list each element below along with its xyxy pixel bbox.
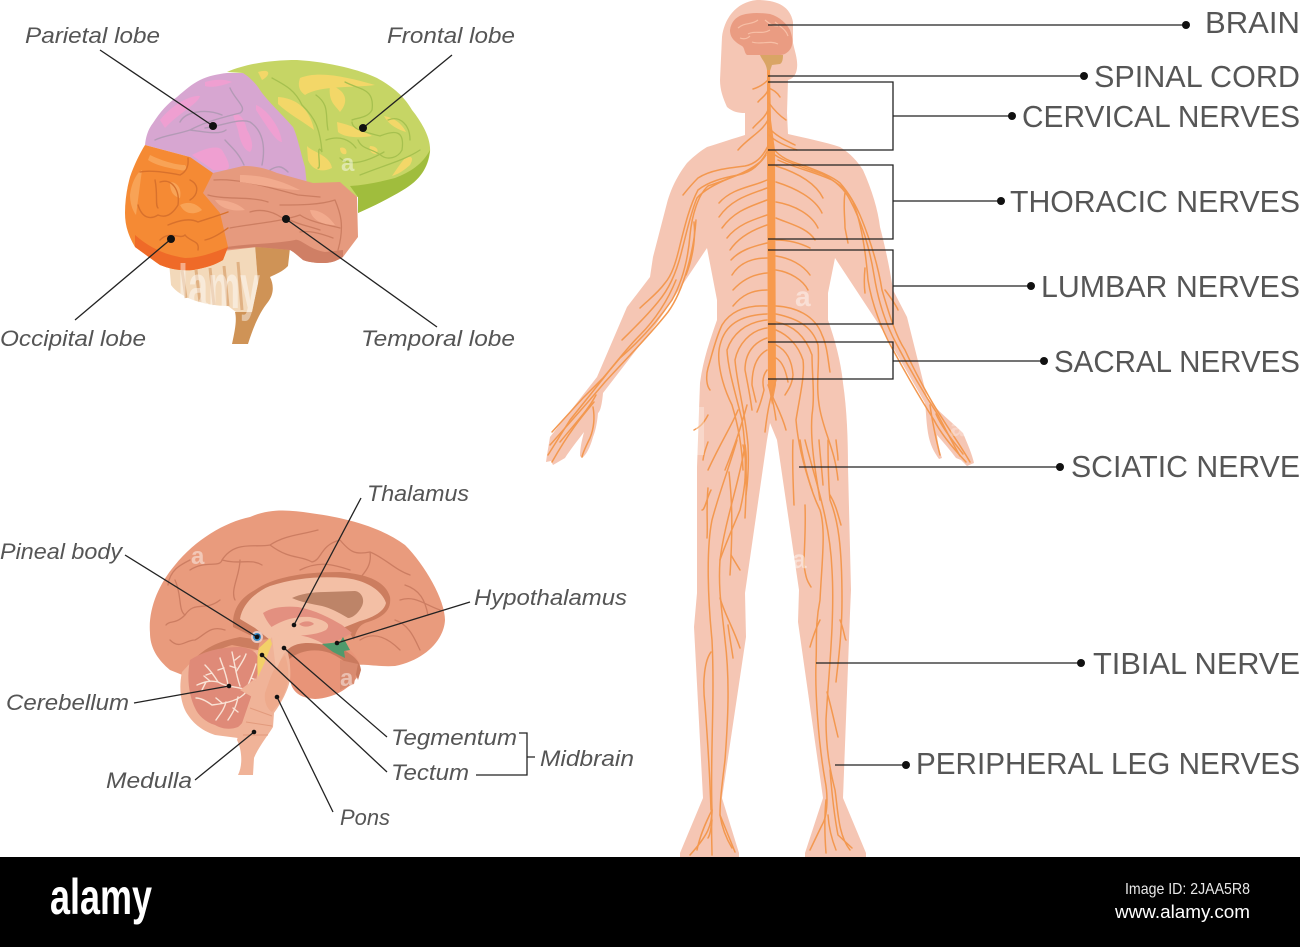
watermark marks: a — [792, 544, 807, 574]
label: pineal body: Pineal body — [0, 539, 124, 564]
label: thoracic nerves: THORACIC NERVES — [1010, 184, 1300, 219]
label: occipital lobe: Occipital lobe — [0, 326, 146, 351]
label: frontal lobe — [359, 23, 515, 132]
label: tectum: Tectum — [391, 760, 469, 785]
nerves: right arm — [773, 148, 970, 462]
watermark marks: a — [341, 150, 355, 177]
website: www.alamy.com — [1114, 902, 1250, 922]
label: frontal lobe: Frontal lobe — [387, 23, 515, 48]
label: cerebellum — [6, 684, 231, 715]
label: hypothalamus: Hypothalamus — [474, 585, 627, 610]
label: brain: BRAIN — [1205, 5, 1300, 40]
watermark marks — [191, 543, 354, 692]
label: pons — [275, 695, 390, 830]
watermark marks — [178, 150, 355, 322]
label: parietal lobe — [25, 23, 217, 130]
alamy logo: alamy — [50, 869, 152, 925]
lobe: parietal — [145, 73, 308, 195]
panel: human body nervous system — [546, 0, 974, 857]
hypothalamus — [322, 637, 350, 658]
watermark marks: a — [340, 665, 354, 692]
nerves: left arm — [548, 146, 768, 462]
watermark marks — [792, 281, 965, 574]
label: hypothalamus — [335, 585, 627, 645]
label: thalamus — [292, 481, 469, 627]
watermark marks: a — [795, 281, 811, 312]
label: tibial nerve: TIBIAL NERVE — [1093, 646, 1300, 681]
tectum and tegmentum — [257, 635, 325, 677]
label: tegmentum — [282, 646, 517, 750]
lobe: temporal — [200, 166, 358, 263]
label: lumbar nerves — [768, 250, 1300, 324]
label: lumbar nerves: LUMBAR NERVES — [1041, 269, 1300, 304]
temporal section — [283, 643, 361, 699]
label: temporal lobe: Temporal lobe — [361, 326, 515, 351]
nerves: left leg — [690, 440, 746, 855]
brain stem and cerebellum — [169, 245, 290, 344]
cerebrum — [150, 510, 445, 680]
nerves: right leg — [793, 440, 852, 853]
watermark marks: a — [191, 543, 205, 570]
label: sacral nerves — [768, 342, 1300, 379]
brainstem — [237, 637, 290, 775]
label: tegmentum: Tegmentum — [391, 725, 517, 750]
label: pons: Pons — [340, 805, 390, 830]
label: temporal lobe — [282, 215, 515, 351]
panel: brain lobes diagram — [125, 60, 430, 344]
label: medulla — [106, 730, 256, 793]
lobe: occipital — [125, 145, 228, 270]
label: tectum — [260, 653, 469, 785]
cerebellum — [180, 647, 262, 738]
label: sciatic nerve: SCIATIC NERVE — [1071, 449, 1300, 484]
lobe: frontal — [227, 60, 430, 213]
label: parietal lobe: Parietal lobe — [25, 23, 160, 48]
label: cervical nerves — [768, 82, 1300, 150]
watermark marks: lamy — [178, 253, 260, 322]
label: spinal cord — [768, 59, 1300, 94]
spinal cord — [767, 70, 776, 405]
label: thalamus: Thalamus — [367, 481, 469, 506]
label: spinal cord: SPINAL CORD — [1094, 59, 1300, 94]
nerves: pelvis — [694, 306, 838, 500]
label: cerebellum: Cerebellum — [6, 690, 129, 715]
pineal body — [251, 631, 263, 643]
corpus callosum — [233, 572, 390, 644]
body silhouette — [546, 0, 974, 857]
label: thoracic nerves — [768, 165, 1300, 239]
image id: Image ID: 2JAA5R8 — [1125, 881, 1250, 898]
watermark marks: a — [950, 412, 965, 442]
footer bar — [0, 857, 1300, 947]
label: pineal body — [0, 539, 259, 639]
brain in head — [730, 13, 792, 71]
label: midbrain bracket: Midbrain — [540, 746, 634, 771]
label: sciatic nerve — [799, 449, 1300, 484]
nerves: neck — [738, 80, 797, 150]
label: medulla: Medulla — [106, 768, 192, 793]
label: midbrain bracket — [476, 733, 634, 775]
nerves: right ribs — [776, 166, 823, 290]
panel: brain cross-section diagram — [150, 510, 445, 775]
label: occipital lobe — [0, 235, 175, 351]
nerves: left ribs — [719, 180, 767, 306]
label: tibial nerve — [816, 646, 1300, 681]
label: brain — [768, 5, 1300, 40]
